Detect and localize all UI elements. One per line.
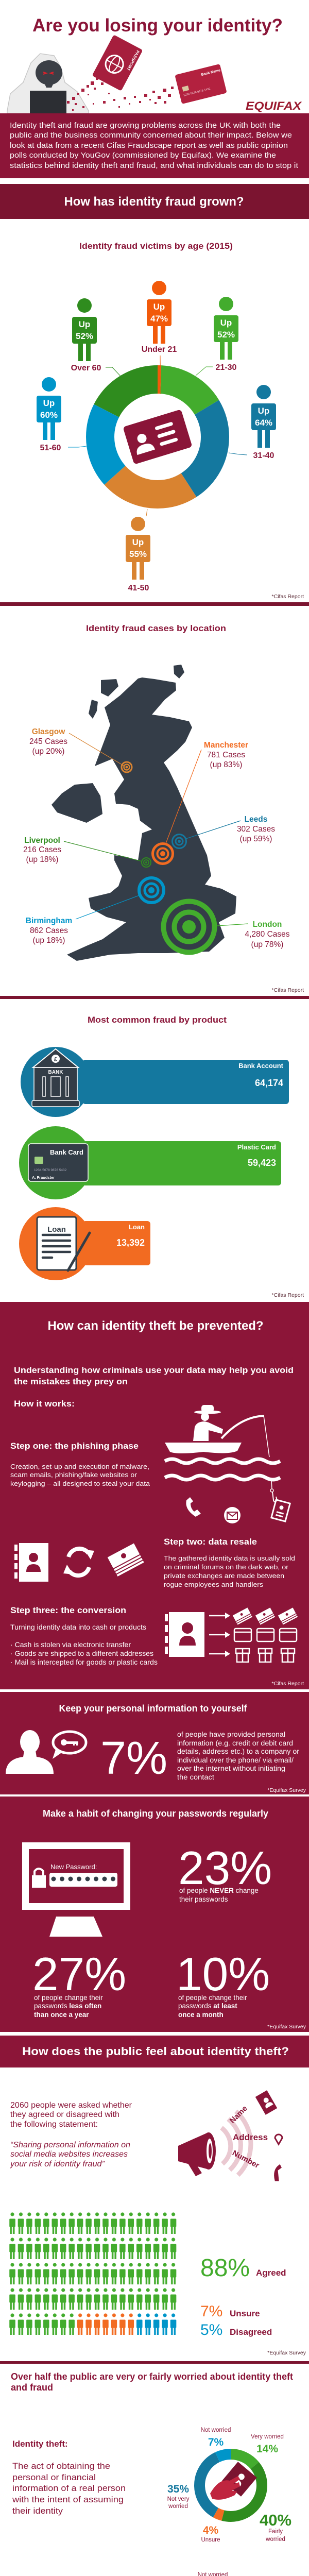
age figures — [37, 281, 276, 592]
survey statement text — [10, 2101, 132, 2168]
callout: London: London — [253, 920, 282, 929]
icon: bank — [32, 1049, 79, 1107]
panel: keep personal information: *Equifax Survey — [267, 1787, 306, 1793]
intro text: the mistakes they prey on — [14, 1377, 128, 1386]
hero illustration: hacker stealing passport and card: Bank Name — [201, 69, 221, 77]
legend: survey percentages: Agreed — [256, 2268, 286, 2278]
figure: 51-60: Up — [43, 398, 55, 408]
callout: Leeds: Leeds — [245, 815, 267, 824]
donut chart: victims by age — [100, 379, 215, 495]
icons: step two — [14, 1543, 145, 1582]
icon: bank card: 1234 5678 9876 5432 — [34, 1168, 67, 1172]
heading: fraud by product: Most common fraud by product — [88, 1015, 227, 1025]
stat: 27%: of people change their — [34, 1994, 103, 2002]
icon: ID card — [123, 409, 193, 465]
legend: survey percentages: Disagreed — [230, 2327, 272, 2337]
panel: identity theft worry: The act of obtaining the — [12, 2461, 110, 2471]
icon: loan document: Loan — [47, 1225, 66, 1234]
panel: identity theft worry — [12, 2427, 291, 2543]
stat: 27%: passwords less often — [34, 2002, 101, 2010]
step three text: · Goods are shipped to a different addresses — [10, 1649, 153, 1657]
stat: 27%: than once a year — [34, 2011, 89, 2019]
icon: monitor with password: New Password: — [50, 1863, 97, 1871]
callout: Leeds — [186, 815, 275, 843]
figure: 51-60: 60% — [40, 410, 58, 420]
step one text: Step one: the phishing phase — [10, 1441, 139, 1451]
figure: 21-30: 21-30 — [216, 363, 237, 372]
heading: how can identity theft be prevented: How can identity theft be prevented? — [47, 1319, 264, 1333]
panel: keep personal information: details, address etc.) to a company or — [177, 1748, 300, 1755]
callout: Glasgow: 245 Cases — [29, 737, 67, 746]
icon: person with speech bubble — [6, 1730, 86, 1774]
callout: London — [217, 920, 290, 949]
step two text: private exchanges are made between — [164, 1572, 284, 1580]
panel: change passwords — [0, 1797, 309, 2032]
intro panel: look at data from a recent Cifas Fraudscape report as well as public opinion — [10, 142, 288, 150]
footnote: *Cifas Report — [272, 987, 304, 993]
figure: 31-40 — [229, 385, 276, 460]
callout: Manchester — [166, 741, 248, 843]
figure: over 60 — [71, 298, 121, 376]
figure: 21-30 — [196, 297, 238, 376]
icon: bank card: A. Fraudster — [32, 1175, 55, 1180]
figure: under 21: 47% — [150, 314, 168, 324]
step three text: Step three: the conversion — [10, 1605, 126, 1615]
panel: keep personal information: the contact — [177, 1773, 214, 1781]
stat: 23%: of people NEVER change — [179, 1887, 259, 1894]
survey statement text: your risk of identity fraud” — [10, 2160, 105, 2168]
panel: identity theft worry: Unsure — [201, 2537, 220, 2543]
survey statement text: “Sharing personal information on — [10, 2141, 130, 2149]
hero illustration: hacker stealing passport and card — [7, 35, 227, 113]
icon: bank card: Bank Card — [50, 1148, 83, 1156]
intro panel: polls conducted by YouGov (commissioned by Equifax). We examine the — [10, 151, 276, 160]
bar: loan — [19, 1207, 150, 1280]
stat: 23%: 23% — [178, 1842, 272, 1894]
stat: 10%: passwords at least — [178, 2002, 237, 2010]
figure: 51-60 — [37, 377, 87, 452]
map callouts — [23, 727, 290, 949]
panel: identity theft worry: 14% — [256, 2443, 278, 2455]
callout: Glasgow — [29, 727, 124, 766]
figure: under 21: Under 21 — [142, 345, 177, 354]
panel: prevention: How it works: — [14, 1399, 75, 1409]
icon: megaphone broadcasting personal data — [178, 2090, 282, 2180]
callout: Liverpool — [23, 836, 142, 864]
figure: over 60: 52% — [76, 331, 93, 341]
title: Are you losing your identity? — [32, 15, 283, 36]
legend: survey percentages: 88% — [200, 2255, 250, 2282]
section header: How has identity fraud grown — [0, 184, 309, 219]
stat: 10%: once a month — [178, 2011, 224, 2019]
callout: Manchester: 781 Cases — [207, 751, 245, 759]
panel: keep personal information — [0, 1692, 309, 1794]
intro panel: Identity theft and fraud are growing problems across the UK with both the — [10, 122, 281, 130]
panel: identity theft worry: Identity theft: — [12, 2439, 68, 2449]
hero illustration: hacker stealing passport and card: 1234 5678 9876 5432 — [183, 88, 211, 97]
icon: bank: BANK — [48, 1070, 63, 1075]
panel: identity theft worry: Very worried — [251, 2434, 284, 2440]
intro panel: statistics behind identity theft and fraud, and what individuals can do to stop it — [10, 162, 298, 170]
step two text: on criminal forums on the dark web, or — [164, 1563, 289, 1571]
callout: Manchester: Manchester — [204, 741, 248, 750]
step two text: Step two: data resale — [164, 1537, 257, 1547]
callout: London: (up 78%) — [251, 940, 283, 949]
figure: over 60: Up — [79, 319, 90, 329]
panel: prevention — [0, 1302, 309, 1689]
legend: survey percentages: 5% — [200, 2321, 222, 2338]
figure: 31-40: 64% — [255, 418, 272, 428]
figure: under 21: Up — [153, 302, 165, 312]
panel: identity theft worry: 4% — [203, 2524, 218, 2536]
step two text: The gathered identity data is usually sold — [164, 1554, 295, 1562]
legend: survey percentages — [200, 2255, 286, 2338]
stat: 10%: 10% — [176, 1948, 270, 2001]
bar: bank account: Bank Account — [238, 1062, 284, 1070]
figure: 31-40: 31-40 — [253, 451, 274, 460]
step one text: Creation, set-up and execution of malware, — [10, 1463, 149, 1470]
panel: identity theft worry: Not worried — [201, 2427, 231, 2433]
logo: Equifax: EQUIFAX — [246, 99, 302, 112]
step one text: keylogging – all designed to steal your data — [10, 1480, 150, 1487]
icon: megaphone broadcasting personal data: Address — [233, 2132, 268, 2142]
panel: change passwords: Make a habit of changing your passwords regularly — [43, 1808, 268, 1819]
heading: over half the public worried — [11, 2371, 293, 2393]
panel: identity theft worry: 40% — [260, 2511, 291, 2529]
bar: plastic card: 59,423 — [248, 1158, 276, 1168]
hero illustration: hacker stealing passport and card: PASSPORT — [126, 49, 140, 72]
callout: Birmingham — [26, 895, 139, 945]
callout: Liverpool: Liverpool — [24, 836, 60, 845]
icon: megaphone broadcasting personal data: Number — [231, 2149, 261, 2170]
panel: identity theft worry: personal or financial — [12, 2472, 96, 2482]
intro panel: public and the business community concerned about their impact. Below we — [10, 131, 292, 140]
step three text — [10, 1605, 158, 1666]
survey statement text: 2060 people were asked whether — [10, 2101, 132, 2110]
callout: Liverpool: (up 18%) — [26, 855, 58, 864]
panel: keep personal information: individual over the phone/ via email/ — [177, 1756, 294, 1764]
survey statement text: the following statement: — [10, 2120, 98, 2129]
heading: over half the public worried: Over half the public are very or fairly worried about identity theft — [11, 2371, 293, 2382]
stat: 10%: of people change their — [178, 1994, 247, 2002]
panel: keep personal information: information (e.g. credit or debit card — [177, 1739, 293, 1747]
step two text: rogue employees and handlers — [164, 1581, 264, 1588]
bar: bank account: 64,174 — [255, 1078, 283, 1088]
callout: London: 4,280 Cases — [245, 930, 290, 939]
icon: bank: £ — [54, 1056, 57, 1062]
figure: 21-30: Up — [220, 318, 232, 328]
footnote: *Cifas Report — [272, 594, 304, 600]
callout: Leeds: (up 59%) — [240, 835, 272, 843]
panel: identity theft worry: Not very — [167, 2496, 190, 2502]
step one text: scam emails, phishing/fake websites or — [10, 1471, 138, 1479]
donut chart: identity theft — [200, 2454, 262, 2516]
UK map — [52, 665, 236, 961]
panel: identity theft worry: worried — [168, 2503, 188, 2510]
callout: Glasgow: (up 20%) — [32, 747, 64, 756]
icons: step three conversion — [165, 1607, 298, 1662]
panel: keep personal information: 7% — [100, 1733, 167, 1784]
stat: 23%: their passwords — [179, 1895, 228, 1903]
callout: Manchester: (up 83%) — [210, 760, 242, 769]
panel: prevention: *Cifas Report — [272, 1681, 304, 1687]
figure: 51-60: 51-60 — [40, 444, 61, 452]
panel: identity theft worry: 7% — [208, 2436, 224, 2448]
heading: victims by age: Identity fraud victims by age (2015) — [79, 242, 233, 251]
figure: over 60: Over 60 — [71, 364, 101, 372]
step one text — [10, 1441, 150, 1487]
heading: cases by location: Identity fraud cases by location — [86, 623, 226, 633]
panel: keep personal information: Keep your personal information to yourself — [59, 1703, 247, 1714]
survey statement text: social media websites increases — [10, 2150, 128, 2159]
panel: identity theft worry: worried — [265, 2536, 285, 2543]
callout: Liverpool: 216 Cases — [23, 845, 61, 854]
step two text — [164, 1537, 295, 1588]
panel: identity theft worry: with the intent of assuming — [12, 2495, 124, 2504]
callout: Glasgow: Glasgow — [32, 727, 65, 736]
callout: Birmingham: Birmingham — [26, 917, 72, 925]
bar: bank account — [21, 1047, 289, 1117]
callout: Birmingham: 862 Cases — [30, 926, 68, 935]
icon: monitor with password — [22, 1842, 130, 1937]
icon: bank card — [28, 1144, 88, 1181]
figure: 21-30: 52% — [217, 330, 235, 340]
step three text: · Cash is stolen via electronic transfer — [10, 1640, 131, 1649]
icon: fisherman phishing — [165, 1405, 290, 1523]
section header: public feeling: How does the public feel about identity theft? — [22, 2045, 289, 2058]
figure: 41-50: 55% — [129, 549, 147, 559]
pictogram: 100 people survey result — [8, 2212, 178, 2338]
bar: loan: Loan — [129, 1223, 145, 1231]
section header: How has identity fraud grown: How has identity fraud grown? — [64, 195, 244, 209]
footnote: *Cifas Report — [272, 1292, 304, 1298]
step three text: Turning identity data into cash or products — [10, 1623, 146, 1631]
intro text — [14, 1365, 294, 1386]
stat: 27%: 27% — [32, 1948, 126, 2001]
survey statement text: they agreed or disagreed with — [10, 2110, 119, 2119]
section header: public feeling — [0, 2036, 309, 2067]
step three text: · Mail is intercepted for goods or plastic cards — [10, 1658, 158, 1666]
legend: survey percentages: Unsure — [230, 2309, 260, 2318]
panel: keep personal information: of people have provided personal — [177, 1731, 285, 1738]
figure: 41-50: 41-50 — [128, 584, 149, 592]
panel: keep personal information: over the internet without initiating — [177, 1765, 285, 1772]
callout: Leeds: 302 Cases — [237, 825, 275, 834]
intro panel — [0, 113, 309, 178]
panel: identity theft worry: 35% — [167, 2483, 189, 2495]
figure: under 21 — [142, 281, 177, 394]
intro text: Understanding how criminals use your data may help you avoid — [14, 1365, 294, 1375]
infographic: *Equifax Survey — [267, 2350, 306, 2356]
figure: 41-50 — [126, 509, 150, 592]
panel: identity theft worry: Fairly — [268, 2529, 283, 2535]
legend: survey percentages: 7% — [200, 2303, 222, 2320]
callout: Birmingham: (up 18%) — [33, 936, 65, 945]
icon: megaphone broadcasting personal data: Name — [228, 2104, 249, 2125]
bar: plastic card — [19, 1126, 281, 1199]
figure: 41-50: Up — [132, 537, 144, 547]
panel: identity theft worry: their identity — [12, 2506, 63, 2516]
panel: change passwords: *Equifax Survey — [267, 2024, 306, 2030]
map targets — [122, 762, 214, 952]
figure: 31-40: Up — [258, 406, 269, 416]
bar: plastic card: Plastic Card — [237, 1143, 276, 1151]
panel: identity theft worry: information of a real person — [12, 2483, 126, 2493]
icon: loan document — [37, 1217, 90, 1270]
heading: over half the public worried: and fraud — [11, 2382, 53, 2393]
bar: loan: 13,392 — [116, 1238, 145, 1248]
